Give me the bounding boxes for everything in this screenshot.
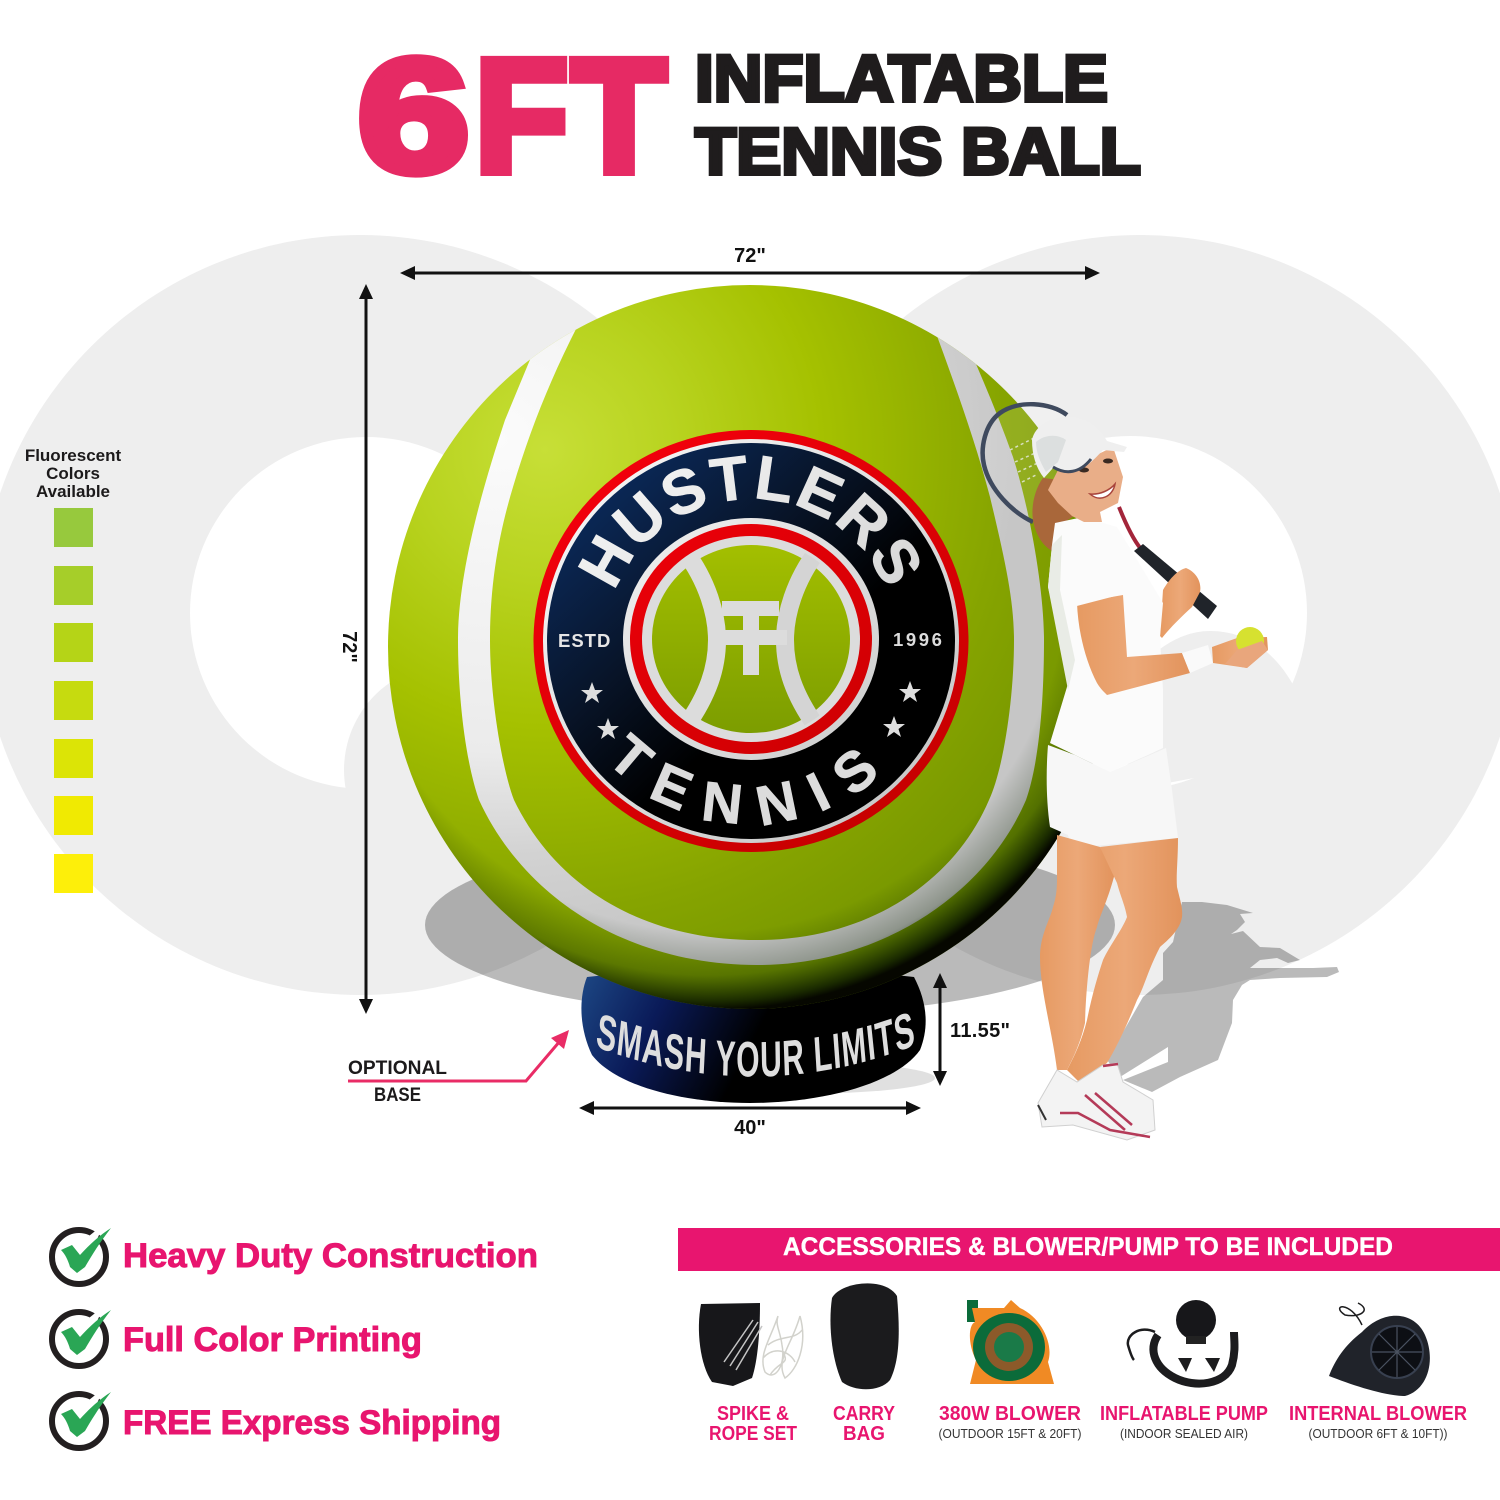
- accessory: inflatable pump: [1100, 1300, 1268, 1441]
- callout text base: BASE: [374, 1085, 421, 1106]
- shorts: [1047, 745, 1178, 848]
- label: 72": [734, 245, 766, 267]
- racket head: [983, 404, 1067, 522]
- label: [709, 1403, 797, 1445]
- accessory: 380W blower: [938, 1300, 1082, 1441]
- feature: heavy duty construction: [52, 1224, 538, 1284]
- hustlers tennis logo: [534, 430, 968, 852]
- shirt shading: [1048, 535, 1075, 690]
- shirt sleeve: [1073, 550, 1123, 607]
- swatch column: [54, 508, 93, 893]
- left ring crescent: [344, 664, 556, 876]
- inflatable base: [581, 976, 926, 1103]
- feature: free express shipping: [52, 1388, 501, 1448]
- logo arc text tennis: TENNIS: [614, 732, 876, 826]
- ball ground shadow: [425, 835, 1115, 1015]
- dimension 72 width: [400, 245, 1100, 280]
- feature text: Full Color Printing: [123, 1321, 422, 1359]
- swatch caption: Colors: [46, 464, 100, 483]
- racket handle: [1119, 507, 1217, 619]
- check icon: [52, 1388, 111, 1448]
- logo arc text hustlers: HUSTLERS: [578, 455, 920, 588]
- sublabel: (OUTDOOR 15FT & 20FT): [938, 1426, 1082, 1441]
- arm: [1077, 595, 1190, 695]
- icon: carry bag: [830, 1283, 899, 1389]
- colour swatches: [25, 446, 122, 893]
- hand: [1212, 637, 1268, 668]
- woman with racket: [983, 404, 1268, 1140]
- woman ground shadow: [1107, 902, 1339, 1092]
- feature text: Heavy Duty Construction: [123, 1237, 538, 1275]
- title: 6: 6: [358, 26, 469, 205]
- feature: full color printing: [52, 1306, 422, 1366]
- white shirt: [1048, 517, 1163, 772]
- inflatable tennis ball: [388, 285, 1112, 1009]
- title: tennis ball: TENNIS BALL: [695, 114, 1141, 188]
- label: BAG: [843, 1423, 885, 1445]
- callout arrow: [348, 1041, 560, 1081]
- label: 40": [734, 1117, 766, 1139]
- smile: [1090, 484, 1115, 498]
- swatch caption: Available: [36, 482, 110, 501]
- white cap: [1032, 417, 1127, 478]
- right grey ring: [760, 235, 1500, 995]
- fingers: [1225, 641, 1268, 668]
- label: INTERNAL BLOWER: [1289, 1403, 1467, 1425]
- base soft shadow: [655, 1062, 935, 1094]
- accessories panel: [678, 1228, 1500, 1445]
- arrow: [579, 1101, 921, 1115]
- logo year: 1996: [893, 629, 945, 650]
- label: 72": [338, 631, 360, 663]
- dimension 11.55 base height: [933, 973, 1010, 1086]
- title: inflatable: INFLATABLE: [695, 41, 1108, 115]
- front leg: [1067, 838, 1182, 1083]
- right ring crescent: [1120, 631, 1296, 790]
- back leg: [1040, 835, 1115, 1070]
- logo estd: ESTD: [558, 630, 611, 651]
- feature checklist: [52, 1224, 538, 1448]
- accessory: carry bag: [830, 1283, 899, 1445]
- logo stars: [581, 681, 921, 739]
- hair: [1032, 478, 1074, 552]
- base body: [581, 960, 926, 1103]
- wristband: [1182, 645, 1213, 673]
- label: [833, 1403, 896, 1445]
- icon: orange blower: [967, 1300, 1054, 1384]
- logo inner red ring: [630, 524, 872, 754]
- logo seams: [686, 558, 816, 720]
- label: INFLATABLE PUMP: [1100, 1403, 1268, 1425]
- ball body: [388, 285, 1112, 1009]
- optional base callout: [348, 1030, 569, 1106]
- ball white seam stripe: [458, 325, 1044, 965]
- base slogan: SMASH YOUR LIMITS: [597, 1014, 914, 1077]
- check icon: [52, 1306, 111, 1366]
- eyes: [1079, 458, 1113, 472]
- callout text optional: OPTIONAL: [348, 1058, 447, 1079]
- white sneakers: [1038, 1063, 1155, 1140]
- face: [1048, 447, 1123, 522]
- label: 11.55": [950, 1020, 1010, 1042]
- arrow: [933, 973, 947, 1086]
- logo inner pale ring: [642, 536, 860, 742]
- title: F: F: [475, 26, 568, 205]
- sublabel: (OUTDOOR 6FT & 10FT)): [1308, 1426, 1448, 1441]
- logo green centre: [652, 545, 850, 733]
- label: 380W BLOWER: [939, 1403, 1082, 1425]
- accessories header bar: [678, 1228, 1500, 1271]
- logo monogram: [715, 601, 787, 675]
- accessory: spike and rope set: [699, 1303, 803, 1445]
- title: [358, 26, 1141, 205]
- logo white ring: [543, 439, 959, 843]
- arrow: [400, 266, 1100, 280]
- back arm: [1160, 568, 1200, 638]
- icon: internal blower: [1329, 1303, 1430, 1396]
- check icon: [52, 1224, 111, 1284]
- accessory: internal blower: [1289, 1303, 1467, 1441]
- left grey ring: [0, 235, 740, 995]
- icon: pump: [1128, 1300, 1234, 1384]
- background: grey ring shapes: [0, 235, 1500, 995]
- dimension 40 base width: [579, 1101, 921, 1139]
- title: T: T: [572, 26, 666, 205]
- icon: spikes: [724, 1320, 762, 1370]
- icon: ropes: [763, 1316, 803, 1378]
- icon: drawstring bag: [699, 1303, 760, 1386]
- logo navy disc: [547, 443, 955, 839]
- sublabel: (INDOOR SEALED AIR): [1120, 1426, 1248, 1441]
- label: CARRY: [833, 1403, 896, 1425]
- swatch caption: Fluorescent: [25, 446, 122, 465]
- arrow: [359, 284, 373, 1014]
- ball shading: [388, 285, 1112, 1009]
- label: ROPE SET: [709, 1423, 797, 1445]
- dimension 72 height: [338, 284, 373, 1014]
- logo outer red ring: [534, 430, 968, 852]
- accessories header bar: ACCESSORIES & BLOWER/PUMP TO BE INCLUDED: [783, 1233, 1393, 1261]
- logo inner white ring: [623, 518, 879, 760]
- feature text: FREE Express Shipping: [123, 1404, 501, 1442]
- small tennis ball: [1236, 627, 1264, 655]
- label: SPIKE &: [717, 1403, 789, 1425]
